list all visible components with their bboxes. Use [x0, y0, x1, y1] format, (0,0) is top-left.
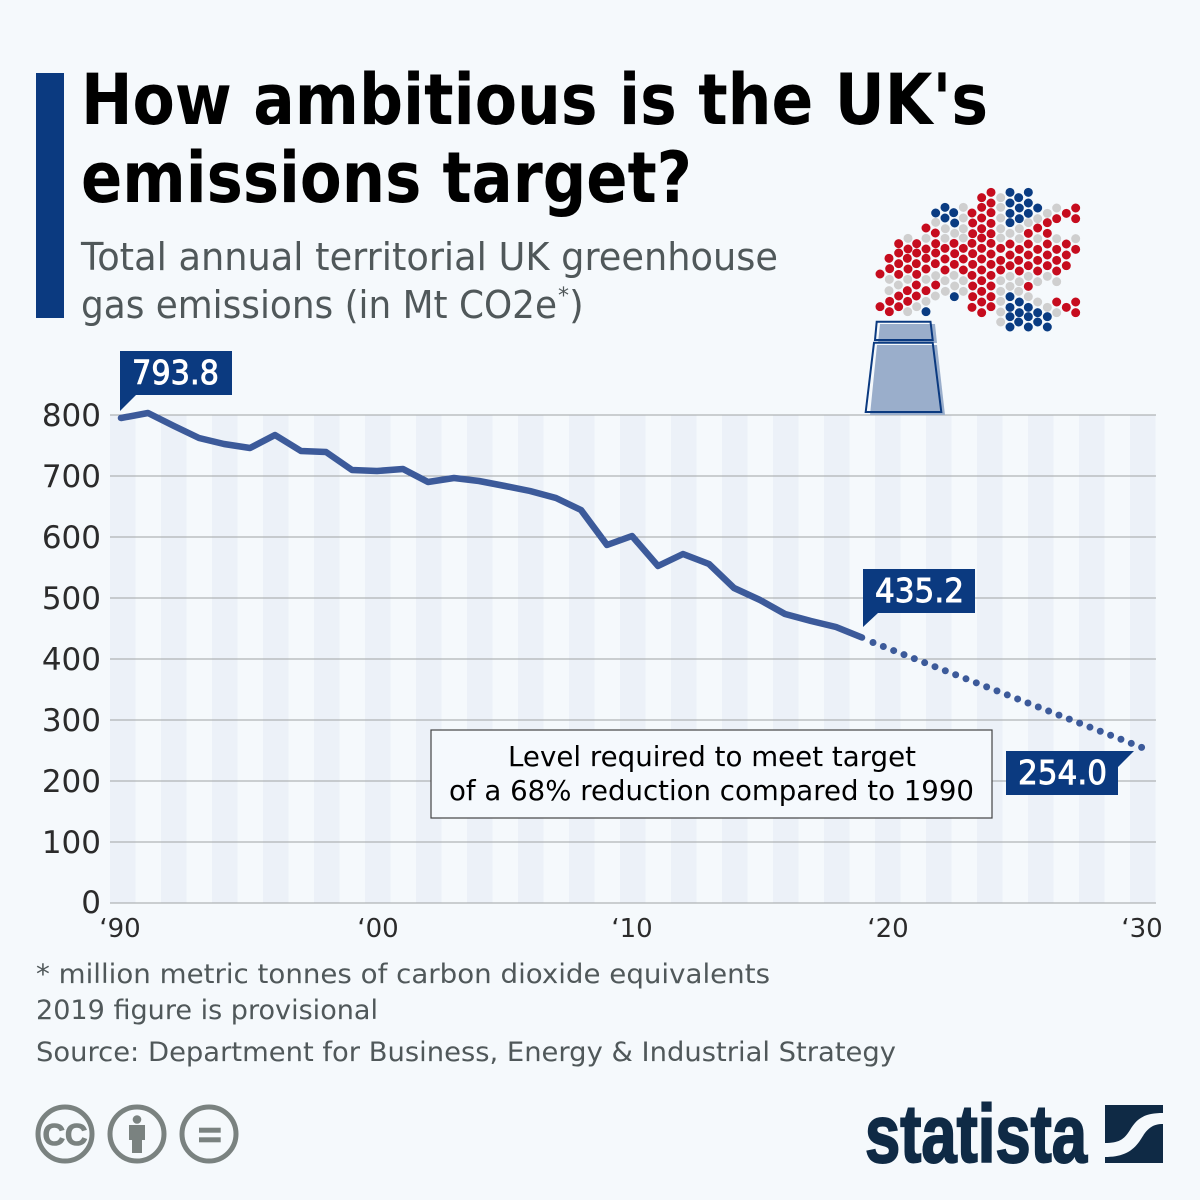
icon: creative commons — [38, 1107, 92, 1161]
x axis labels: ‘20 — [867, 914, 909, 944]
x axis labels: ‘10 — [611, 914, 653, 944]
subtitle: * — [558, 284, 569, 309]
x axis labels — [99, 914, 1163, 944]
title: How ambitious is the UK's — [81, 59, 988, 141]
subtitle: ) — [569, 283, 584, 327]
statista wordmark: statista — [865, 1089, 1088, 1180]
y axis labels — [42, 398, 101, 921]
callout: 435.2 — [863, 569, 975, 627]
icon: attribution — [110, 1107, 164, 1161]
title — [81, 59, 988, 219]
y axis labels: 800 — [42, 398, 101, 434]
y axis labels: 200 — [42, 764, 101, 800]
icon: chimney — [866, 322, 945, 415]
source: Source: Department for Business, Energy & Industrial Strategy — [36, 1037, 896, 1068]
callout: 254.0: 254.0 — [1018, 753, 1107, 792]
icon: creative commons: CC — [43, 1117, 87, 1152]
line chart: actual emissions — [121, 413, 862, 638]
subtitle: Total annual territorial UK greenhouse — [80, 235, 778, 279]
x axis labels: ‘30 — [1121, 914, 1163, 944]
icon: no derivatives — [182, 1107, 236, 1161]
footnote: 2019 figure is provisional — [36, 995, 378, 1026]
dotted projection to target — [873, 642, 1142, 748]
accent bar — [36, 73, 64, 318]
y axis labels: 300 — [42, 703, 101, 739]
callout: 254.0 — [1006, 751, 1134, 795]
y axis labels: 600 — [42, 520, 101, 556]
footnote: * million metric tonnes of carbon dioxide equivalents — [36, 959, 770, 990]
annotation box: Level required to meet target — [508, 740, 916, 773]
title: emissions target? — [81, 137, 692, 219]
y axis labels: 500 — [42, 581, 101, 617]
annotation box: of a 68% reduction compared to 1990 — [449, 774, 974, 807]
callout: 793.8 — [120, 351, 232, 411]
callout: 793.8: 793.8 — [132, 353, 219, 392]
y axis labels: 100 — [42, 825, 101, 861]
icon: smoke as union jack dots — [880, 192, 1076, 327]
subtitle: gas emissions (in Mt CO2e — [81, 283, 557, 327]
chart background stripes — [110, 415, 1156, 903]
callout: 435.2: 435.2 — [875, 571, 964, 610]
y axis labels: 0 — [81, 885, 101, 921]
x axis labels: ‘90 — [99, 914, 141, 944]
x axis labels: ‘00 — [357, 914, 399, 944]
y axis labels: 400 — [42, 642, 101, 678]
statista logo mark — [1105, 1105, 1163, 1163]
subtitle — [80, 235, 778, 327]
y axis labels: 700 — [42, 459, 101, 495]
footnote — [36, 959, 770, 1026]
annotation box — [431, 730, 992, 818]
